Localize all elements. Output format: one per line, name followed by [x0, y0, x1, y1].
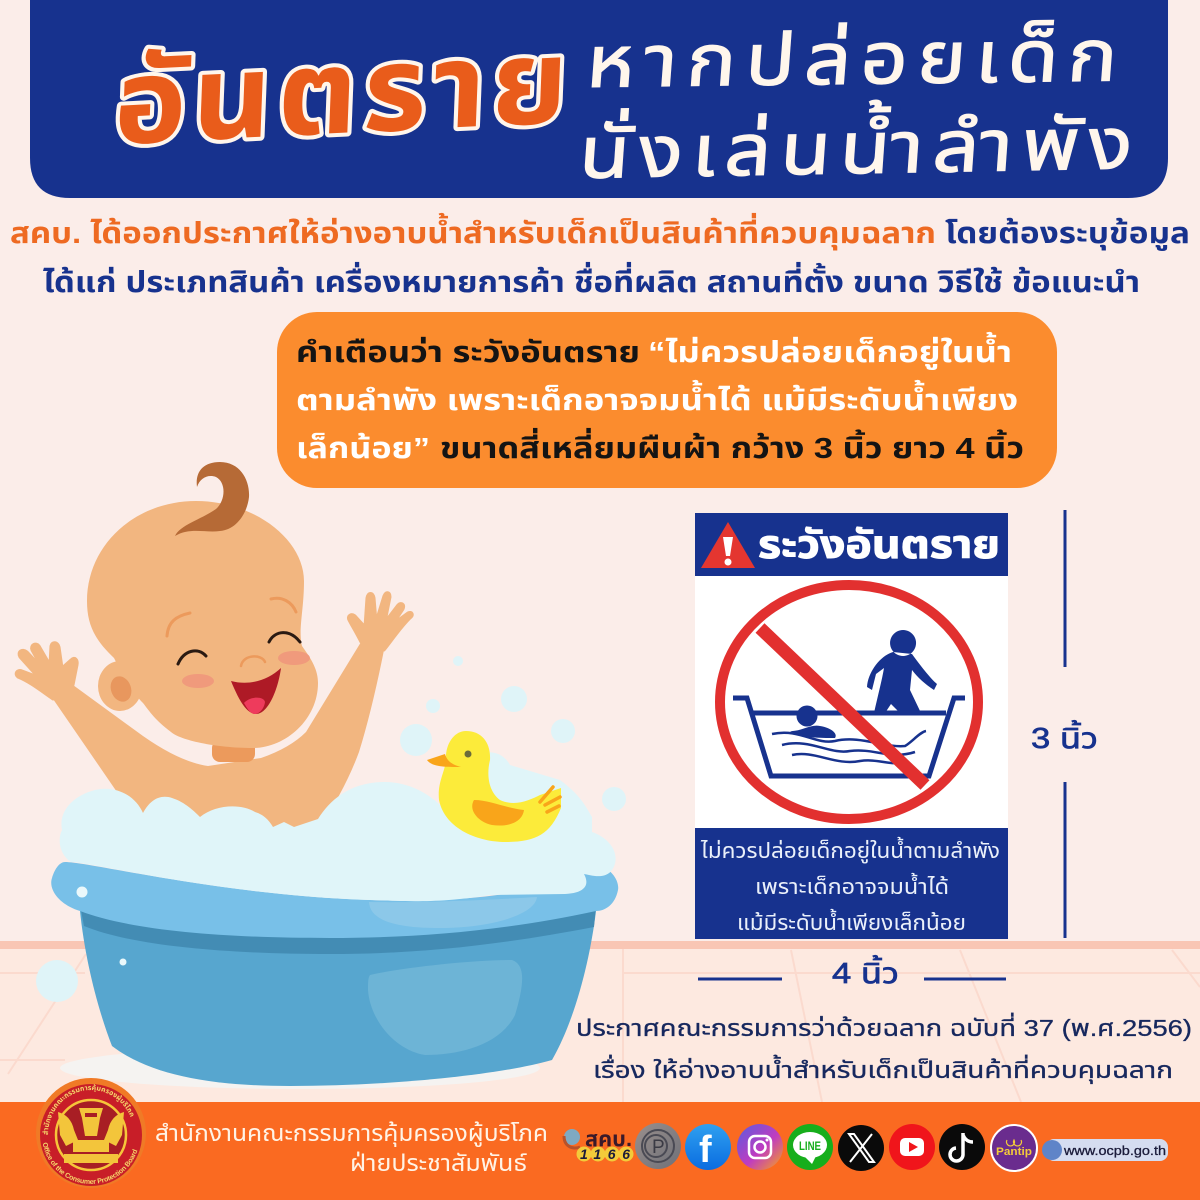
legal reference text: ประกาศคณะกรรมการว่าด้วยฉลาก ฉบับที่ 37 (พ.ศ.2556)	[576, 1012, 1192, 1041]
legal reference text: เรื่อง ให้อ่างอาบน้ำสำหรับเด็กเป็นสินค้าที่ควบคุมฉลาก	[593, 1054, 1173, 1084]
callout line 2: ตามลำพัง เพราะเด็กอาจจมน้ำได้ แม้มีระดับน้ำเพียง	[296, 379, 1018, 417]
title line 2: นั่งเล่นน้ำลำพัง	[577, 95, 1145, 194]
office seal	[36, 1078, 146, 1188]
sign footer	[695, 828, 1008, 939]
sign footer text: ไม่ควรปล่อยเด็กอยู่ในน้ำตามลำพัง	[700, 836, 1000, 864]
seal lettering: สำนักงานคณะกรรมการคุ้มครองผู้บริโภค	[42, 1084, 134, 1135]
tub highlight	[368, 960, 522, 1055]
sign header	[695, 513, 1008, 576]
callout line 1 black: คำเตือนว่า ระวังอันตราย	[296, 337, 640, 369]
office name: สำนักงานคณะกรรมการคุ้มครองผู้บริโภค	[155, 1120, 548, 1148]
hotline logo	[564, 1128, 634, 1162]
icon: facebook	[685, 1124, 731, 1171]
seal emblem	[58, 1108, 124, 1163]
prohibited pictogram	[720, 585, 978, 819]
website pill	[1042, 1139, 1168, 1161]
baby right hand	[348, 593, 412, 650]
tub rim	[51, 862, 618, 938]
hotline logo: สคบ.	[585, 1128, 632, 1151]
title word: danger: อันตราย	[112, 15, 577, 170]
dimension: width 4 inches: 4 นิ้ว	[832, 955, 899, 990]
dimension: height 3 inches: 3 นิ้ว	[1031, 720, 1098, 755]
callout line 3 white: เล็กน้อย”	[296, 433, 430, 465]
icon: line: LINE	[799, 1139, 821, 1153]
child and water	[796, 706, 818, 726]
callout line 3 black: ขนาดสี่เหลี่ยมผืนผ้า กว้าง 3 นิ้ว ยาว 4 นิ้ว	[440, 427, 1024, 465]
icon: line	[787, 1124, 833, 1170]
bathtub outline	[733, 698, 965, 776]
sign heading: ระวังอันตราย	[758, 524, 1000, 567]
adult figure	[867, 630, 937, 713]
legal reference text	[576, 1012, 1192, 1084]
department name: ฝ่ายประชาสัมพันธ์	[350, 1150, 527, 1176]
illustration: baby in bathtub	[16, 462, 626, 1089]
intro line 2: ได้แก่ ประเภทสินค้า เครื่องหมายการค้า ชื่อที่ผลิต สถานที่ตั้ง ขนาด วิธีใช้ ข้อแนะนำ	[43, 261, 1140, 299]
baby ear	[98, 661, 142, 711]
foam	[60, 752, 616, 901]
icon: agency emblem: P	[652, 1137, 665, 1158]
baby tongue	[244, 698, 265, 714]
title banner	[30, 0, 1168, 198]
baby arms and torso	[53, 642, 384, 830]
sign footer text: เพราะเด็กอาจจมน้ำได้	[755, 872, 949, 899]
rim highlight	[369, 897, 537, 928]
icon: agency emblem	[635, 1123, 681, 1169]
tub inner band	[80, 905, 596, 954]
baby left hand	[16, 643, 77, 699]
hotline logo: 1166	[580, 1146, 630, 1162]
intro text	[10, 212, 1190, 299]
baby hair curl	[175, 462, 249, 536]
icon: tiktok	[939, 1124, 985, 1170]
callout line 1 white: “ไม่ควรปล่อยเด็กอยู่ในน้ำ	[648, 331, 1012, 370]
tub body	[80, 911, 596, 1086]
icon: pantip: Pantip	[996, 1146, 1032, 1158]
warning triangle icon	[701, 522, 755, 568]
tub shadow	[60, 1047, 540, 1089]
warning sign	[695, 513, 1008, 939]
soap bubbles	[36, 656, 626, 1002]
tub sparkles	[76, 886, 126, 966]
sign footer text	[700, 836, 1000, 935]
rubber duck	[427, 731, 561, 842]
intro line 1 orange: สคบ. ได้ออกประกาศให้อ่างอาบน้ำสำหรับเด็กเป็นสินค้าที่ควบคุมฉลาก	[10, 212, 936, 250]
seal lettering: Office of the Consumer Protection Board	[43, 1142, 138, 1184]
seal lettering	[42, 1084, 138, 1184]
baby neck	[212, 740, 255, 762]
title line 1: หากปล่อยเด็ก	[584, 16, 1130, 103]
sign footer text: แม้มีระดับน้ำเพียงเล็กน้อย	[737, 908, 966, 935]
website pill: www.ocpb.go.th	[1063, 1143, 1166, 1158]
icon: x	[838, 1125, 884, 1171]
footer bar	[0, 1078, 1200, 1200]
baby mouth	[231, 668, 281, 714]
prohibition ring and slash	[720, 585, 978, 819]
warning callout	[277, 312, 1057, 488]
icon: youtube	[889, 1124, 935, 1170]
baby face features	[167, 598, 310, 714]
baby head	[87, 501, 318, 748]
intro line 1 navy: โดยต้องระบุข้อมูล	[945, 218, 1190, 251]
icon: facebook: f	[699, 1129, 712, 1171]
icon: instagram	[737, 1124, 783, 1170]
icon: pantip	[991, 1125, 1037, 1171]
